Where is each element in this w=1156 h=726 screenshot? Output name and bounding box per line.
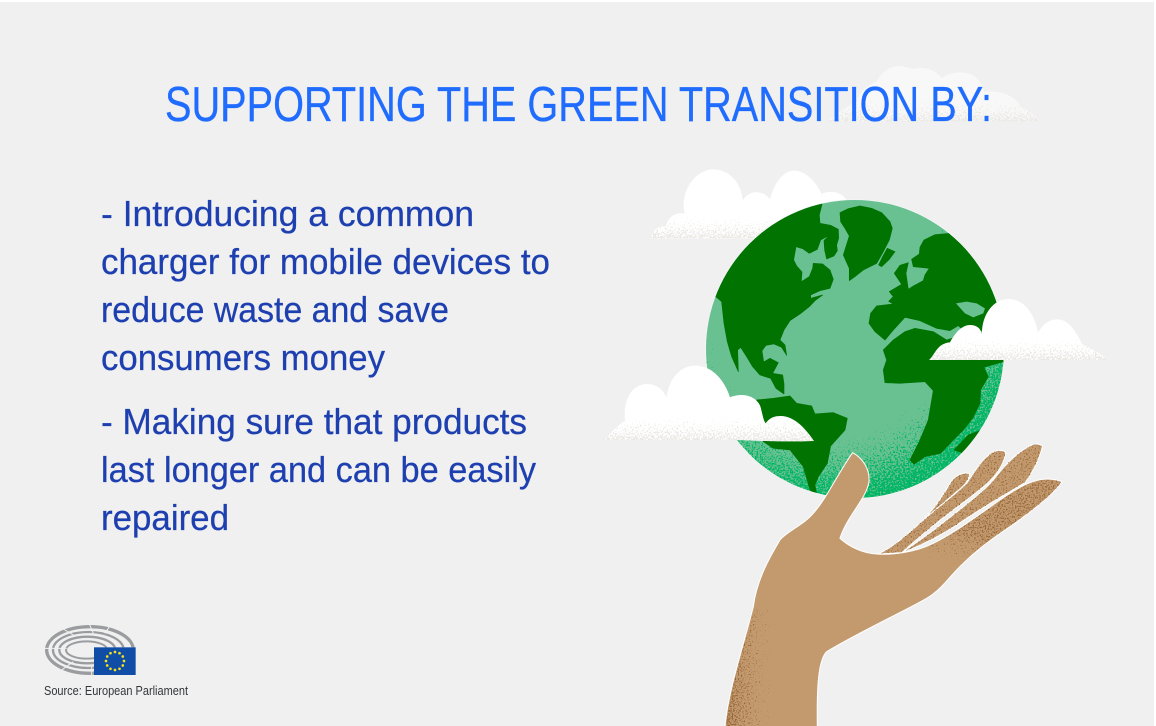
Iceland bbox=[879, 248, 895, 267]
bullet: durable products: last longer and can be easily bbox=[101, 449, 536, 490]
palm, thumb and index finger bbox=[725, 453, 1062, 726]
bullet: durable products: - Making sure that products bbox=[101, 401, 527, 442]
EU flag bbox=[94, 647, 136, 675]
ring finger bbox=[878, 450, 1006, 554]
shading: index finger and palm bbox=[887, 480, 1061, 578]
bullet: durable products: repaired bbox=[101, 497, 229, 538]
bullet: common charger: reduce waste and save bbox=[101, 289, 449, 330]
bullet: common charger bbox=[101, 193, 550, 378]
bullet: common charger: charger for mobile devices to bbox=[101, 241, 550, 282]
source credit: Source: European Parliament bbox=[44, 684, 188, 698]
South America bbox=[757, 396, 847, 494]
middle finger bbox=[902, 444, 1043, 553]
cloud: lower left bbox=[605, 366, 814, 441]
text block: green transition measures bbox=[101, 193, 550, 538]
Eurasia bbox=[868, 233, 996, 340]
inland sea bbox=[956, 302, 985, 317]
small finger bbox=[923, 473, 970, 521]
bullet: common charger: consumers money bbox=[101, 337, 385, 378]
Greenland bbox=[840, 206, 892, 281]
North America bbox=[707, 200, 839, 394]
continents bbox=[707, 200, 1013, 494]
cloud behind title bbox=[827, 66, 1041, 122]
globe bbox=[700, 193, 1013, 503]
Madagascar bbox=[954, 431, 980, 453]
cloud: right bbox=[929, 299, 1107, 360]
illustration: globe, clouds and hand bbox=[605, 169, 1107, 726]
Africa bbox=[883, 328, 1009, 464]
hemicycle bbox=[47, 627, 133, 673]
hand bbox=[725, 444, 1062, 726]
logo: European Parliament bbox=[43, 622, 136, 675]
bullet: common charger: - Introducing a common bbox=[101, 193, 474, 234]
bullet: durable products bbox=[101, 401, 536, 538]
cloud: top left bbox=[650, 169, 877, 238]
shading: arm bbox=[726, 608, 780, 726]
